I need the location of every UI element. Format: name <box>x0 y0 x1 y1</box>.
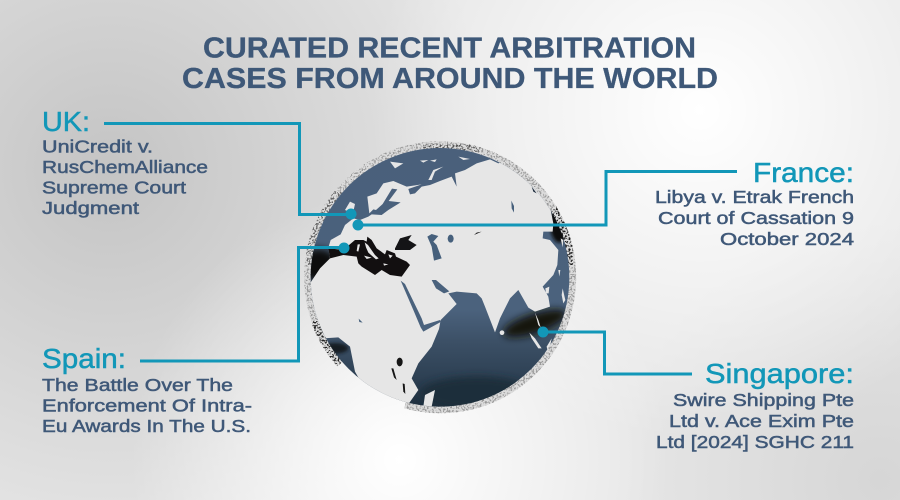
globe <box>304 141 576 414</box>
text block: Singapore: Ltd [2024] SGHC 211 <box>656 432 854 452</box>
text block: UK: UK: <box>42 106 90 137</box>
text block: France: Court of Cassation 9 <box>658 208 854 228</box>
Baikal and small lakes <box>511 201 514 213</box>
text block: Singapore <box>656 358 854 452</box>
text block: UK <box>42 106 208 218</box>
connector: France <box>352 172 737 230</box>
text block: Spain: Spain: <box>42 343 126 374</box>
text block: UK: UniCredit v. <box>42 136 153 156</box>
globe rim <box>308 145 573 410</box>
title: CASES FROM AROUND THE WORLD <box>182 63 718 95</box>
text block: Singapore: Ltd v. Ace Exim Pte <box>669 411 854 431</box>
connector: Spain <box>140 242 350 361</box>
ocean <box>307 147 573 410</box>
Persian Gulf <box>432 280 449 293</box>
title <box>182 32 718 95</box>
text block: France: October 2024 <box>720 229 854 249</box>
continents: Eurasia and Africa <box>310 159 558 403</box>
connector: Singapore <box>538 326 692 374</box>
text block: UK: Supreme Court <box>42 178 186 198</box>
Aral Sea <box>448 235 454 243</box>
text block: France: France: <box>753 157 854 188</box>
Red Sea and Gulf of Aden <box>401 281 441 332</box>
text block: Spain <box>42 343 252 436</box>
text block: Spain: Eu Awards In The U.S. <box>42 416 251 436</box>
islands and peninsulas <box>345 157 565 407</box>
text block: Spain: Enforcement Of Intra- <box>42 396 252 416</box>
text block: France: Libya v. Etrak French <box>655 187 854 207</box>
text block: France <box>655 157 854 249</box>
text block: Singapore: Singapore: <box>705 358 854 389</box>
text block: Singapore: Swire Shipping Pte <box>673 390 854 410</box>
Mediterranean <box>328 237 410 277</box>
Black Sea <box>395 235 417 250</box>
Caspian Sea <box>427 234 442 261</box>
text block: UK: RusChemAlliance <box>42 157 208 177</box>
connector: UK <box>104 124 356 220</box>
text block: Spain: The Battle Over The <box>42 375 233 395</box>
title: CURATED RECENT ARBITRATION <box>203 32 696 64</box>
text block: UK: Judgment <box>42 198 139 218</box>
